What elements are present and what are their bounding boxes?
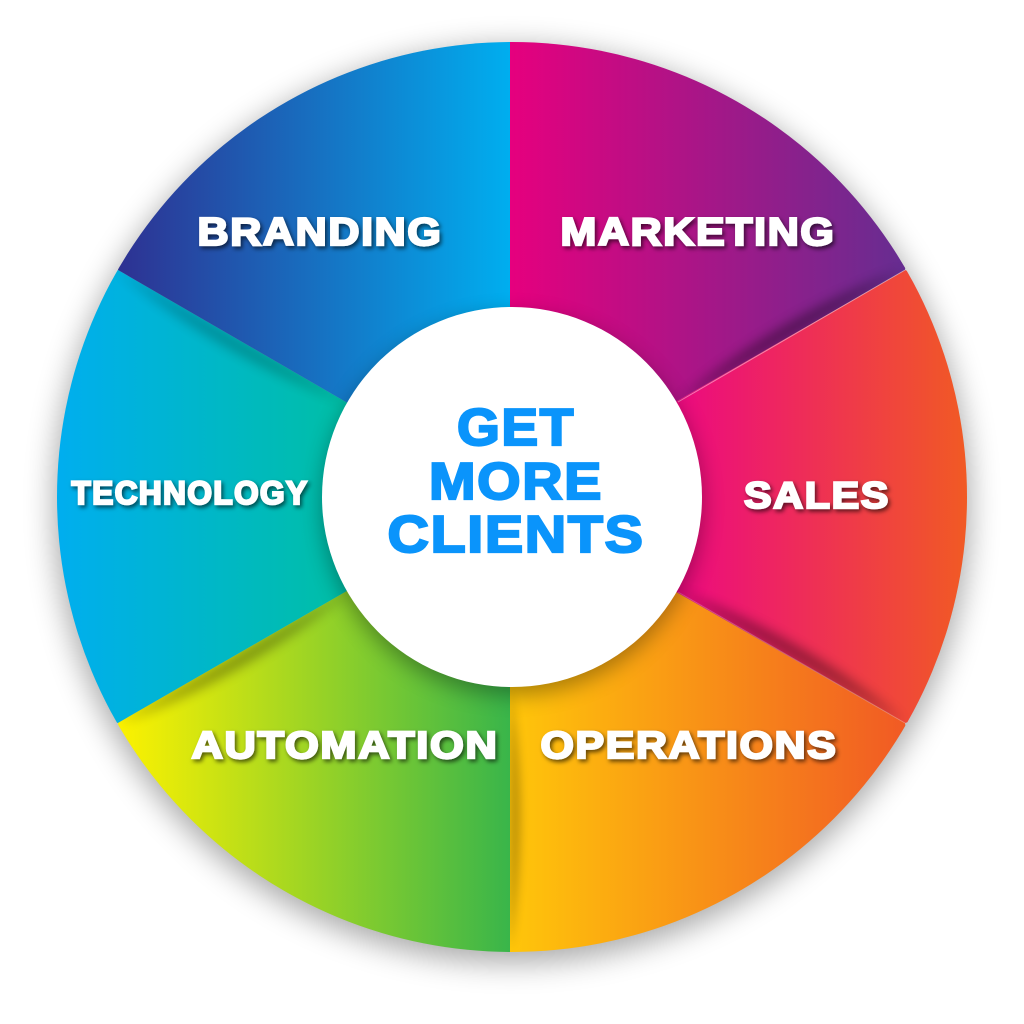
center title: MORE	[429, 453, 603, 511]
fold shadow on operations	[510, 690, 520, 950]
segment: automation	[118, 591, 510, 952]
center title: CLIENTS	[388, 506, 644, 564]
segment: technology	[57, 270, 347, 723]
fold shadow on marketing	[685, 273, 894, 396]
fold shadow on sales	[678, 592, 905, 723]
center title: GET	[457, 399, 575, 457]
label: branding: BRANDING	[198, 211, 442, 254]
fold shadow on automation	[126, 596, 340, 722]
center circle shadow	[322, 315, 702, 695]
fold shadow on technology	[130, 278, 332, 397]
edge highlight: marketing and sales	[678, 270, 905, 402]
label: automation: AUTOMATION	[192, 725, 498, 767]
segment: operations	[510, 592, 906, 952]
center title	[388, 399, 644, 564]
label: technology: TECHNOLOGY	[72, 475, 308, 511]
center circle	[322, 307, 702, 687]
segment: marketing	[510, 42, 906, 402]
label: operations: OPERATIONS	[540, 725, 838, 767]
segment: branding	[118, 42, 510, 402]
label: sales: SALES	[744, 475, 890, 516]
edge highlight: sales and operations	[678, 592, 905, 723]
label: marketing: MARKETING	[560, 211, 836, 254]
segment: sales	[676, 270, 967, 723]
